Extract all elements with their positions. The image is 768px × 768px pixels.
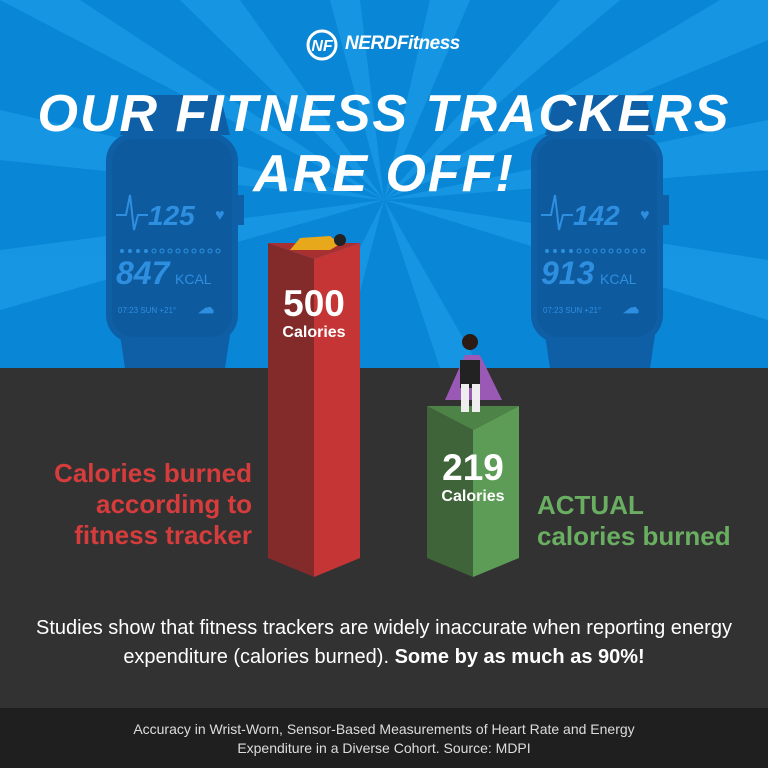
watch left: ♥ bbox=[215, 207, 224, 224]
watch right: ☁ bbox=[623, 300, 639, 317]
title: OUR FITNESS TRACKERS bbox=[38, 85, 730, 143]
red bar bbox=[268, 234, 360, 577]
right caption: calories burned bbox=[537, 521, 731, 551]
left caption: Calories burned according to fitness tracker bbox=[54, 458, 252, 550]
green bar label: Calories bbox=[441, 488, 505, 505]
footer source bbox=[0, 708, 768, 768]
watch right: KCAL bbox=[600, 271, 637, 287]
title: ARE OFF! bbox=[253, 145, 515, 203]
right caption: ACTUAL bbox=[537, 490, 644, 520]
logo: NERDFitness bbox=[345, 33, 460, 54]
green bar bbox=[427, 334, 519, 577]
watch left bbox=[106, 95, 244, 368]
red bar label: 500 bbox=[283, 283, 345, 324]
watch right: ♥ bbox=[640, 207, 650, 224]
watch right: 913 bbox=[541, 255, 595, 291]
blue sky background bbox=[0, 0, 768, 368]
green bar label bbox=[441, 447, 505, 505]
logo: NF bbox=[311, 38, 334, 55]
study text: Studies show that fitness trackers are widely inaccurate when reporting energy expenditure (calories burned). Some by as much as 90%! bbox=[36, 617, 732, 668]
green bar label: 219 bbox=[442, 447, 504, 488]
right caption bbox=[537, 490, 731, 551]
watch left: 125 bbox=[148, 200, 195, 231]
watch left: ☁ bbox=[198, 300, 214, 317]
logo bbox=[306, 30, 460, 60]
watch left: 847 bbox=[116, 255, 172, 291]
bars chart bbox=[268, 234, 519, 577]
footer source: Accuracy in Wrist-Worn, Sensor-Based Measurements of Heart Rate and Energy bbox=[133, 721, 635, 737]
footer source: Expenditure in a Diverse Cohort. Source: MDPI bbox=[237, 740, 531, 756]
watch right bbox=[531, 95, 669, 368]
watch right: 07:23 SUN +21° bbox=[543, 306, 601, 315]
watch left: 07:23 SUN +21° bbox=[118, 306, 176, 315]
title bbox=[38, 85, 730, 203]
watch left: KCAL bbox=[175, 271, 212, 287]
watch right: 142 bbox=[573, 200, 620, 231]
red bar label: Calories bbox=[282, 324, 346, 341]
red bar label bbox=[282, 283, 346, 341]
